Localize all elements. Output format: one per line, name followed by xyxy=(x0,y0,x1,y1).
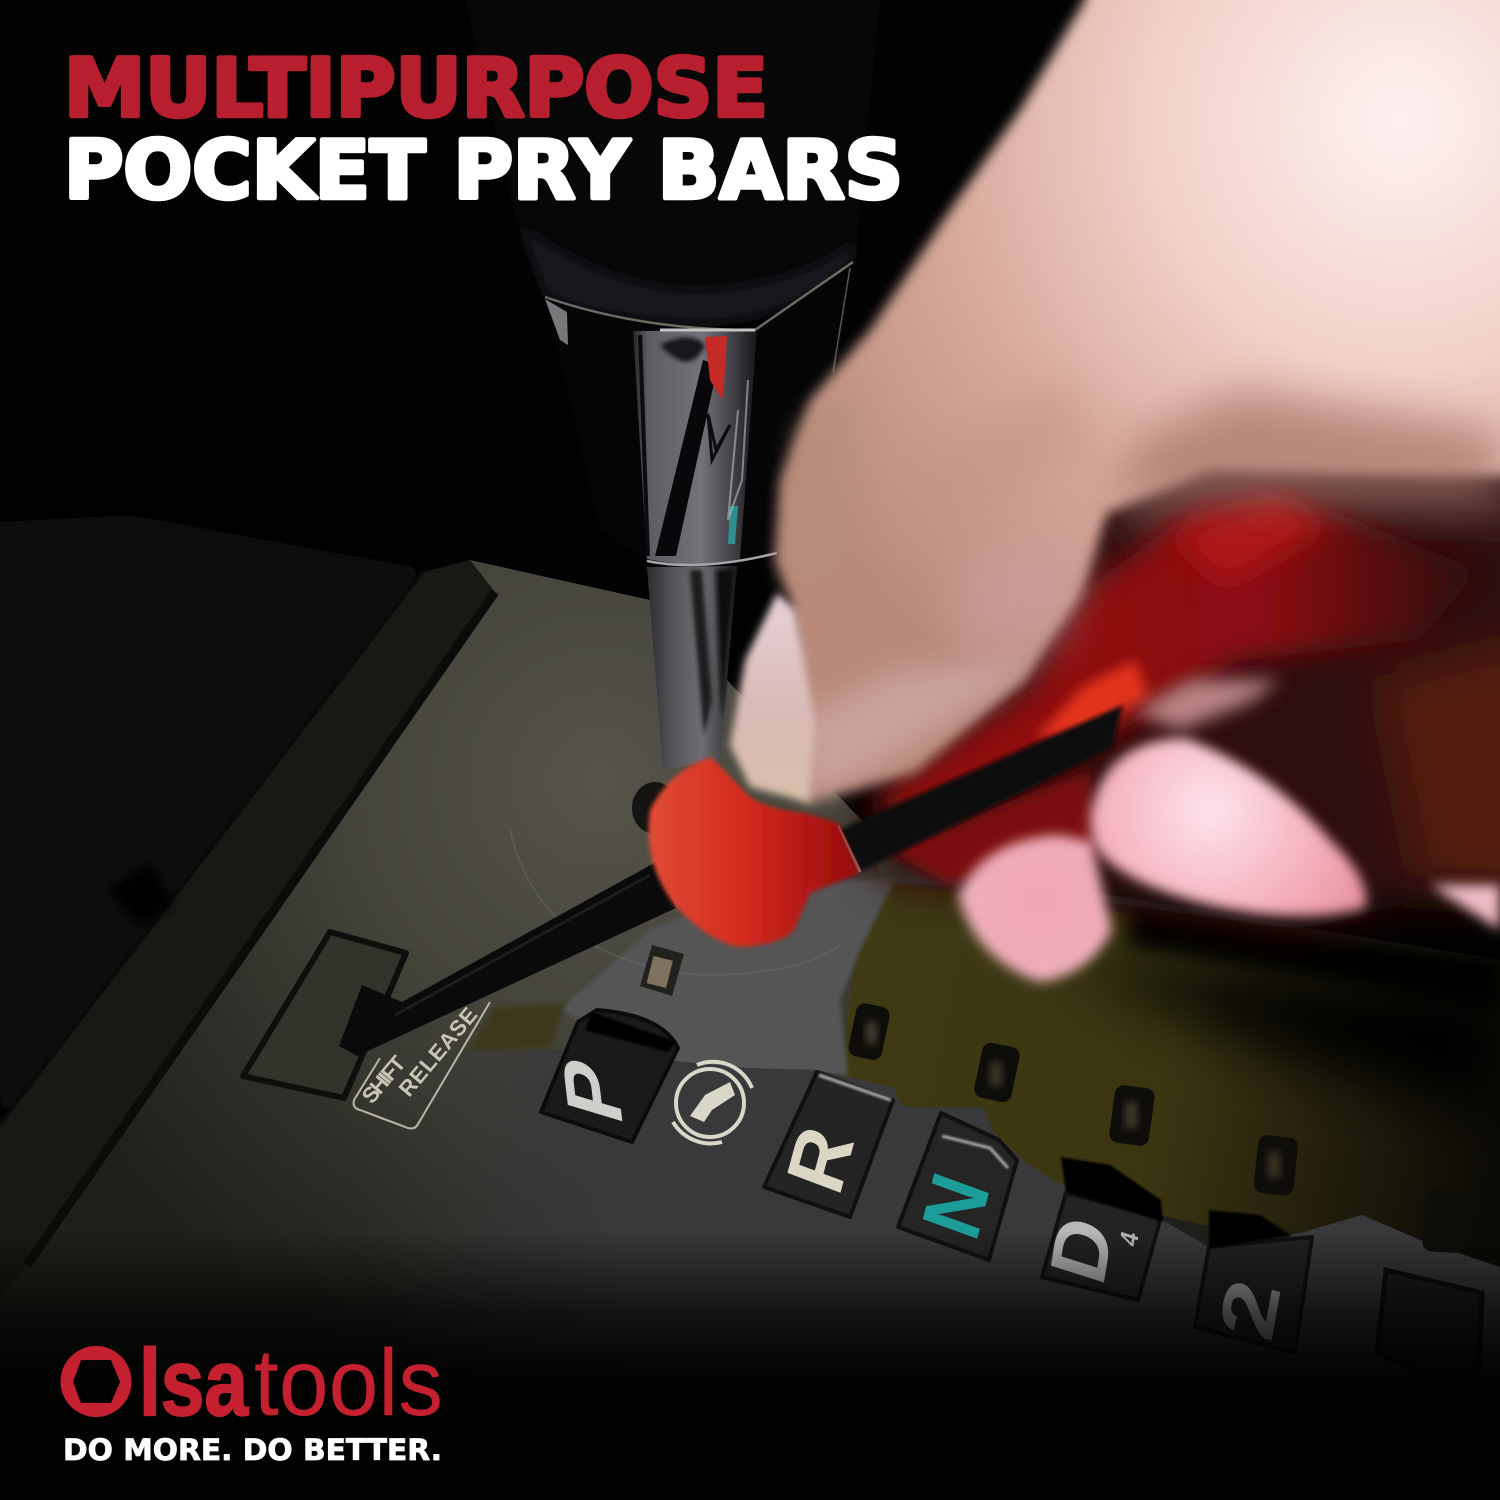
gear letter: D4: 4 xyxy=(1116,1228,1144,1250)
shift release label: SHIFT xyxy=(357,1050,411,1108)
gear letter: P xyxy=(541,1010,678,1142)
red bit holder tip xyxy=(648,757,860,947)
title line: multipurpose: MULTIPURPOSE xyxy=(64,42,768,135)
shift release label: RELEASE xyxy=(394,1002,482,1101)
panel: olive lit band xyxy=(840,880,1500,1290)
bottom fade xyxy=(0,1230,1500,1380)
pale knuckle spot xyxy=(1135,680,1280,730)
red below shaft xyxy=(887,770,1095,885)
shift release label xyxy=(354,1002,490,1128)
pry bar blade xyxy=(339,862,676,1056)
icon: shift lock release button xyxy=(243,932,406,1098)
strip edge line xyxy=(0,570,424,1124)
pale lower right finger xyxy=(1430,885,1500,930)
shaft boot ring xyxy=(632,782,678,834)
chrome shaft xyxy=(647,566,737,770)
shadow strip below fingers xyxy=(1130,905,1500,1010)
panel: grey lower console xyxy=(360,1048,1500,1500)
panel: gear console surface xyxy=(0,560,1500,1500)
gear letter: D4 xyxy=(1034,1157,1163,1300)
logo: Olsatools: tools xyxy=(254,1330,443,1436)
black pry shaft in handle xyxy=(838,705,1123,872)
icon: hex socket O xyxy=(60,1346,132,1417)
small finger xyxy=(958,835,1112,982)
olive wedge xyxy=(470,1003,565,1050)
gear letter: D4: D xyxy=(1034,1206,1130,1293)
leather strip xyxy=(0,560,495,1300)
chrome collar xyxy=(545,262,853,567)
icon: brake circle xyxy=(673,1062,752,1143)
gear letter: N xyxy=(898,1113,1017,1260)
panel: grey lit patch xyxy=(560,880,895,1075)
gear letter: N: N xyxy=(906,1162,1007,1250)
logo: Olsatools xyxy=(60,1330,443,1436)
gear slot: lower button xyxy=(1377,1270,1482,1400)
title line: pocket pry bars: POCKET PRY BARS xyxy=(64,124,903,217)
logo: Olsatools: lsa xyxy=(139,1330,249,1436)
hand: shading xyxy=(790,380,1500,795)
red handle xyxy=(880,495,1480,835)
faint dial arc xyxy=(510,830,840,975)
hand: right fingers xyxy=(958,680,1500,982)
gear letter: R xyxy=(764,1072,893,1217)
hand: palm and index finger xyxy=(775,0,1500,803)
title xyxy=(64,42,903,217)
hand: thumb xyxy=(730,593,815,803)
tagline: DO MORE. DO BETTER. xyxy=(63,1433,442,1467)
gear letter: R: R xyxy=(771,1115,871,1204)
gear letter: 2: 2 xyxy=(1204,1271,1298,1348)
dark maroon hand underlayer xyxy=(870,470,1500,930)
panel: left dark console side xyxy=(0,515,424,1124)
panel: shadowed upper right xyxy=(1060,960,1500,1120)
large finger xyxy=(1090,738,1366,916)
shifter knob xyxy=(465,0,880,325)
icon: gear position indicator slots xyxy=(640,945,1466,1254)
groove line xyxy=(27,592,495,1265)
gear letter: P: P xyxy=(545,1048,640,1132)
gear letter: 2 xyxy=(1195,1210,1312,1353)
icon: dark arrow clip xyxy=(108,862,172,928)
